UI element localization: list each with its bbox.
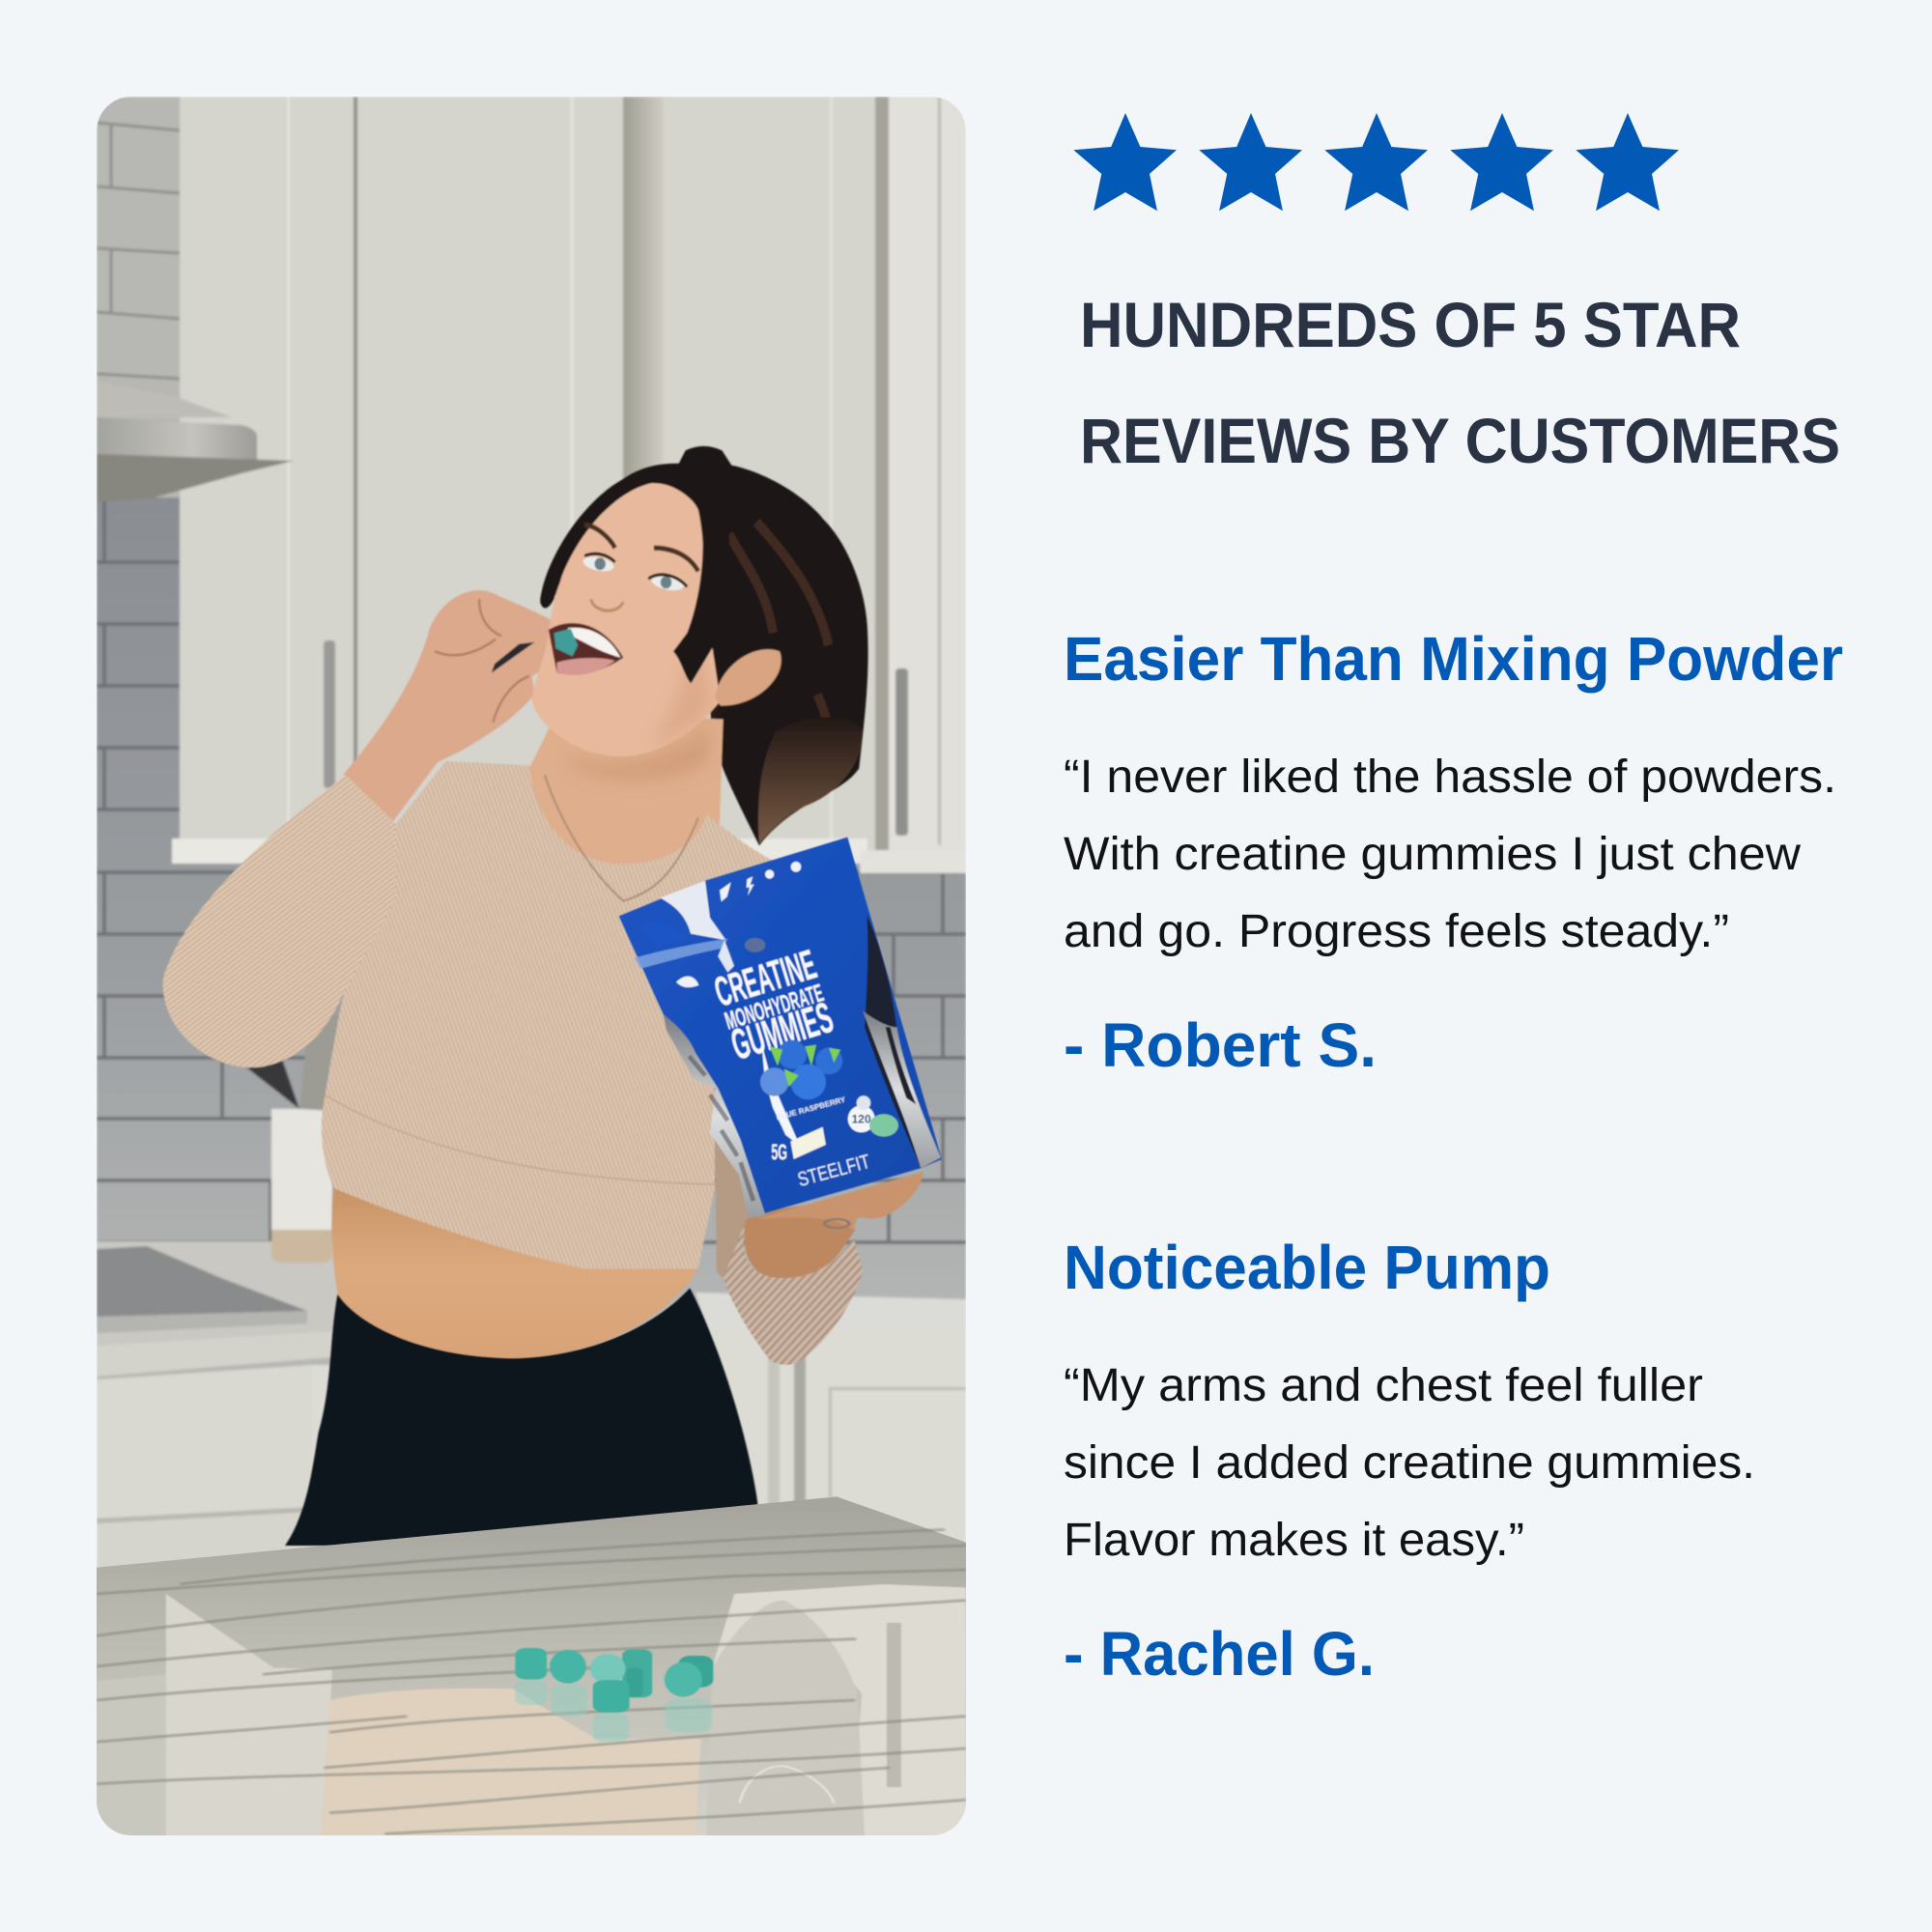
upper cabinets	[178, 97, 877, 851]
finger creases	[435, 599, 529, 723]
lower arm, sleeve cuff and hand holding the pouch	[715, 1141, 923, 1366]
holding hand	[756, 1172, 923, 1230]
gummy at mouth	[554, 629, 578, 656]
stove and back counter	[97, 1239, 338, 1346]
pouch product name	[710, 942, 838, 1069]
review 1 quote: and go. Progress feels steady.”	[1064, 906, 1729, 957]
pouch top icons	[720, 862, 801, 901]
star 2	[1199, 113, 1302, 211]
counter slab	[97, 1496, 966, 1835]
lower cabinets	[97, 1365, 312, 1519]
heading: HUNDREDS OF 5 STAR	[1080, 289, 1741, 360]
shadow under the chin	[568, 725, 712, 780]
pouch logo mark	[745, 938, 765, 952]
right foil edge	[863, 1011, 941, 1168]
pouch product name: MONOHYDRATE	[722, 978, 827, 1036]
review 2 quote: “My arms and chest feel fuller	[1064, 1360, 1703, 1411]
hem line of the top	[325, 1095, 719, 1184]
cabinet handles	[324, 640, 335, 788]
star 5	[1576, 113, 1679, 211]
neck and chest skin	[529, 717, 724, 865]
star 4	[1450, 113, 1553, 211]
woman upper body	[163, 446, 868, 1269]
star 1	[1073, 113, 1177, 211]
5G serving badge: 5G	[771, 1140, 787, 1165]
right dark gusset	[865, 915, 940, 1168]
pouch brand name: STEELFIT	[795, 1151, 873, 1191]
review 1 author: - Robert S.	[1064, 1010, 1377, 1080]
flavour label: BLUE RASPBERRY	[776, 1094, 847, 1122]
wrist skin	[745, 1201, 855, 1278]
reflection arch	[706, 1601, 865, 1835]
hair lighter ends	[758, 717, 863, 843]
review 1 quote	[1064, 752, 1836, 957]
ear	[715, 649, 781, 706]
reflection light left	[166, 1594, 332, 1835]
ring	[825, 1219, 849, 1228]
necklace	[545, 775, 698, 901]
eyes	[582, 555, 614, 572]
review 2 quote	[1064, 1360, 1755, 1566]
black leggings	[285, 1288, 757, 1546]
cheek shade	[663, 665, 724, 738]
face	[532, 483, 721, 756]
gummy reflections	[515, 1681, 712, 1742]
gummies on the counter	[515, 1648, 713, 1713]
review 1 quote: “I never liked the hassle of powders.	[1064, 752, 1836, 803]
hair highlights	[728, 518, 833, 718]
raised sleeve	[163, 775, 396, 1067]
panel: lifestyle photo of woman eating gummy in kitchen	[97, 97, 966, 1835]
120 count badge: 120	[852, 1113, 871, 1126]
kitchen background	[97, 97, 966, 1835]
counter reflections	[97, 1584, 966, 1835]
reflection of top	[321, 1689, 701, 1835]
review 2 quote: Flavor makes it easy.”	[1064, 1515, 1524, 1566]
pouch product name: CREATINE	[710, 942, 822, 1016]
review 2	[1064, 1233, 1755, 1689]
heading	[1080, 289, 1840, 476]
bare midriff	[332, 1176, 701, 1358]
top glare on pouch	[660, 881, 726, 940]
review 1 quote: With creatine gummies I just chew	[1064, 829, 1801, 880]
review 2 title: Noticeable Pump	[1064, 1233, 1550, 1302]
ribbed top	[322, 761, 773, 1269]
review 1 title: Easier Than Mixing Powder	[1064, 624, 1843, 694]
utensil crock	[246, 1014, 338, 1263]
blue raspberry illustration	[760, 1040, 842, 1099]
pouch body	[619, 838, 942, 1218]
raised forearm and hand	[343, 590, 565, 821]
foreground marble counter	[97, 1496, 966, 1835]
review 2 quote: since I added creatine gummies.	[1064, 1437, 1755, 1489]
five star rating	[1073, 113, 1679, 211]
sleeve cuff	[724, 1222, 863, 1365]
foil creases	[689, 1056, 753, 1201]
central vertical glare	[761, 1043, 800, 1147]
star 3	[1324, 113, 1428, 211]
back of the arm	[715, 1111, 750, 1282]
mouth	[549, 623, 623, 674]
backsplash tile	[97, 497, 966, 1299]
reflection of cabinet	[712, 1584, 966, 1835]
marble veins	[97, 1529, 966, 1833]
nose	[591, 599, 623, 611]
hair back mass	[540, 446, 868, 845]
5G serving badge	[771, 1127, 826, 1165]
fingers dark gap	[492, 642, 534, 673]
left foil gusset	[664, 1014, 766, 1218]
review 1	[1064, 624, 1843, 1080]
range hood	[180, 398, 228, 417]
product pouch	[619, 838, 942, 1218]
120 count badge	[848, 1095, 898, 1137]
woman lower body	[285, 1176, 757, 1546]
pouch product name: GUMMIES	[725, 992, 838, 1069]
review 2 author: - Rachel G.	[1064, 1619, 1375, 1689]
hair front strands	[540, 479, 731, 684]
heading: REVIEWS BY CUSTOMERS	[1080, 405, 1840, 476]
